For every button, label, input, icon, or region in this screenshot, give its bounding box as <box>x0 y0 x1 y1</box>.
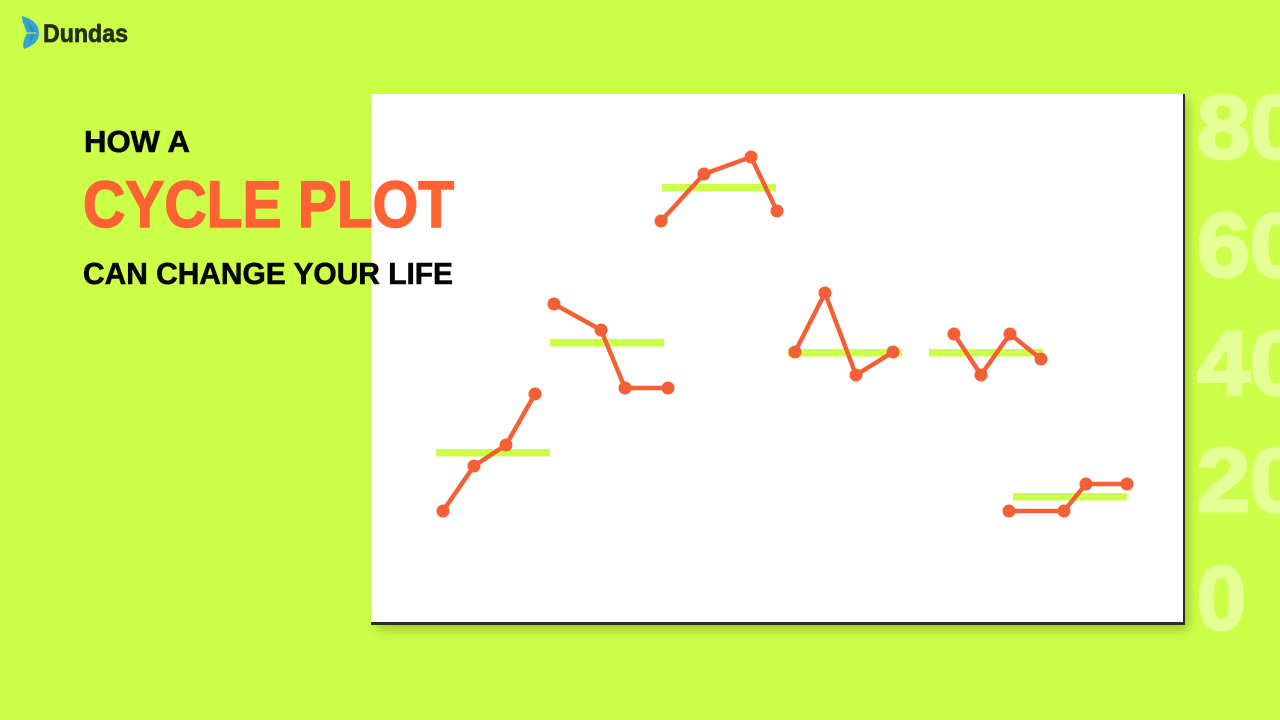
heading line: how a: HOW A <box>84 124 190 159</box>
cycle 2 <box>548 298 674 394</box>
panel: chart card <box>371 94 1189 630</box>
cycle 3 <box>654 150 784 228</box>
heading line: can change your life: CAN CHANGE YOUR LIFE <box>83 256 453 291</box>
logo wordmark: Dundas <box>43 20 128 48</box>
axis numbers: 0 <box>1197 549 1246 649</box>
cycle 4 <box>788 286 902 382</box>
cycle 1 <box>436 388 550 518</box>
title <box>83 124 454 291</box>
cycle 5 <box>929 328 1048 382</box>
axis numbers <box>1197 78 1280 649</box>
cycle 6 <box>1002 478 1134 518</box>
icon: Dundas crescent <box>22 16 39 49</box>
chart: cycle plot <box>436 150 1134 518</box>
logo <box>22 16 128 49</box>
heading line: cycle plot: CYCLE PLOT <box>83 167 454 241</box>
